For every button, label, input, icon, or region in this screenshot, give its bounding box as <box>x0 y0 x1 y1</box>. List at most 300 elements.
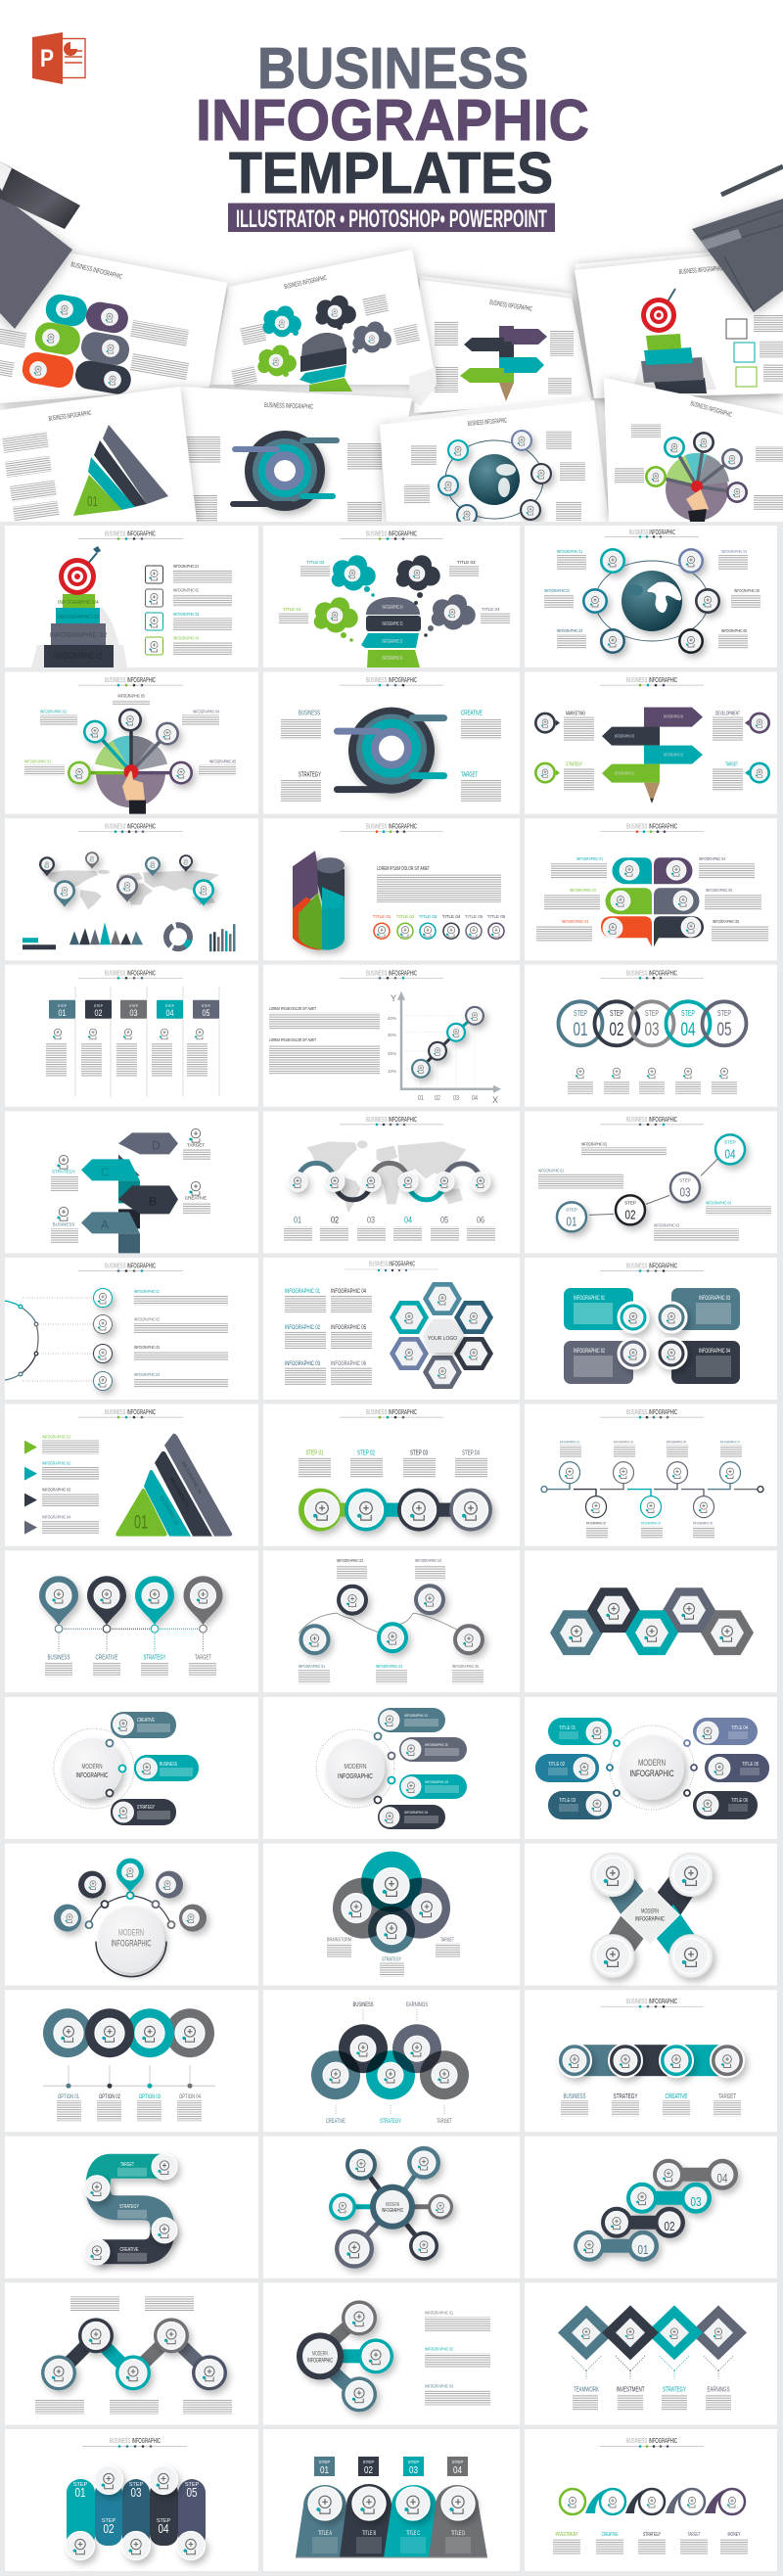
connectors <box>299 1613 459 1633</box>
head: INFOGRAPHIC 04 <box>382 605 403 611</box>
header: BUSINESS INFOGRAPHIC <box>626 1407 677 1416</box>
capsules: 01 <box>74 2485 86 2500</box>
step numbers <box>574 1009 732 1040</box>
nodes <box>288 1172 490 1191</box>
nodes <box>582 548 720 654</box>
text blocks <box>24 694 236 776</box>
circle row <box>373 914 506 939</box>
header: BUSINESS INFOGRAPHIC <box>105 968 156 977</box>
discs <box>311 2024 469 2099</box>
slide: four pins and dotted line <box>5 1550 258 1692</box>
text blocks: INFOGRAPHIC 07 <box>720 1441 740 1445</box>
capsules: STEP <box>157 2518 171 2524</box>
text blocks: STEP 01 <box>305 1450 324 1457</box>
slide card: thought clouds <box>209 250 437 406</box>
pencil <box>644 708 660 804</box>
text blocks: INVESTMENT <box>617 2386 645 2393</box>
pills: TITLE 05 <box>742 1762 759 1768</box>
hexagons <box>550 1587 754 1655</box>
slide: honeycomb <box>263 1258 520 1400</box>
step labels: STEP <box>679 1177 691 1182</box>
header <box>78 529 183 540</box>
header: BUSINESS INFOGRAPHIC <box>105 675 156 684</box>
text blocks: INFOGRAPHIC 02 <box>134 1317 160 1321</box>
text blocks: MONEY <box>728 2532 741 2538</box>
step labels: STEP <box>624 1200 636 1205</box>
rings <box>557 1134 745 1231</box>
pie <box>95 736 167 807</box>
arrows: INFOGRAPHIC 04 <box>664 714 683 719</box>
numbered text: 05 <box>440 1215 448 1224</box>
arrows: INFOGRAPHIC 03 <box>615 734 634 739</box>
triangle: 01 <box>134 1513 148 1534</box>
text blocks: INFOGRAPHIC 05 <box>331 1325 366 1331</box>
boxes <box>564 1288 740 1384</box>
pills: INFOGRAPHIC 02 <box>425 1742 449 1747</box>
text blocks: STRATEGY <box>299 772 321 779</box>
centre disc <box>316 1729 394 1808</box>
slide card: globe: BUSINESS INFOGRAPHIC <box>468 418 507 428</box>
text blocks: STRATEGY <box>643 2532 661 2538</box>
centre label: INFOGRAPHIC <box>307 2358 333 2364</box>
pills: INFOGRAPHIC 04 <box>404 1810 429 1815</box>
circles <box>41 2318 227 2390</box>
big disc: MODERN <box>118 1928 144 1938</box>
text blocks: INFOGRAPHIC 05 <box>706 888 732 893</box>
icons and text: BUSINESS <box>53 1221 74 1226</box>
chain <box>299 1489 492 1532</box>
centre disc: INFOGRAPHIC <box>338 1771 373 1780</box>
nodes <box>560 1462 740 1518</box>
step numbers: STEP <box>610 1009 623 1018</box>
text blocks <box>285 1289 372 1385</box>
text blocks: INFOGRAPHIC 05 <box>667 1441 686 1445</box>
nodes <box>607 1740 697 1796</box>
swirls <box>560 2488 745 2514</box>
labels: EARNINGS <box>406 2001 428 2008</box>
header <box>340 675 443 686</box>
capsules: STEP <box>102 2518 116 2524</box>
hub <box>370 2185 415 2230</box>
arrows: D <box>152 1138 161 1152</box>
arms <box>601 1863 703 1968</box>
text blocks: INFOGRAPHIC 02 <box>337 1558 363 1563</box>
icons and text: STRATEGY <box>52 1169 75 1173</box>
text blocks: TARGET <box>461 772 478 779</box>
text blocks: CREATIVE <box>461 711 483 717</box>
arrows <box>81 1132 178 1253</box>
clouds <box>314 555 476 642</box>
dotted leaders <box>336 2009 444 2115</box>
arrow markers and text <box>24 1435 99 1535</box>
stairs: INFOGRAPHIC 03 <box>58 615 99 621</box>
slide: four boxes <box>525 1258 777 1400</box>
step tabs: 03 <box>129 1008 137 1018</box>
text blocks <box>299 1558 484 1683</box>
axis chart <box>388 991 501 1105</box>
head: INFOGRAPHIC 02 <box>382 639 403 645</box>
text blocks: INFOGRAPHIC 04 <box>331 1289 366 1295</box>
connectors <box>59 2335 209 2372</box>
header: BUSINESS INFOGRAPHIC <box>366 1407 417 1416</box>
discs <box>43 2008 214 2057</box>
discs <box>308 2487 475 2520</box>
slide: hexagon band <box>525 1550 777 1692</box>
icons and text <box>46 1029 207 1077</box>
text blocks <box>134 1289 228 1388</box>
text blocks: INFOGRAPHIC 04 <box>721 549 747 554</box>
text blocks: INFOGRAPHIC 04 <box>699 856 725 861</box>
axis chart: 40% <box>388 1016 396 1021</box>
pills: TITLE 03 <box>559 1798 576 1804</box>
title <box>196 36 589 206</box>
text blocks: INFOGRAPHIC 03 <box>134 1345 160 1350</box>
text blocks: TARGET <box>687 2532 701 2538</box>
slide: six rounded petals <box>525 818 777 960</box>
step labels: 03 <box>679 1184 691 1199</box>
triangle: INFOGRAPHIC 04 <box>179 1461 203 1495</box>
text blocks: LOREM IPSUM DOLOR SIT AMET <box>269 1006 316 1012</box>
slide card: pencil signpost: BUSINESS INFOGRAPHIC <box>489 299 532 313</box>
text blocks: TARGET <box>718 2093 736 2100</box>
labels: CREATIVE <box>119 2247 139 2253</box>
step tabs: 05 <box>202 1008 209 1018</box>
text blocks: INFOGRAPHIC 04 <box>193 710 219 714</box>
header: BUSINESS INFOGRAPHIC <box>369 1259 415 1268</box>
text blocks: OPTION 02 <box>99 2093 120 2100</box>
arrow markers and text: INFOGRAPHIC 04 <box>42 1515 70 1521</box>
icon: PowerPoint logo: P <box>40 45 54 72</box>
text blocks: INFOGRAPHIC 04 <box>641 1522 661 1526</box>
slide card: target stairs <box>575 245 783 398</box>
centre disc: MODERN <box>345 1762 366 1771</box>
options line <box>43 2065 215 2089</box>
icons and text <box>568 1068 737 1094</box>
arc nodes <box>86 1892 174 1928</box>
donut chart <box>166 925 190 948</box>
step numbers: 03 <box>644 1020 660 1040</box>
capsules: STEP <box>129 2482 144 2488</box>
text blocks: BUSINESS <box>47 1653 70 1662</box>
step tabs: STEP <box>165 1004 175 1008</box>
step numbers: 04 <box>681 1020 696 1040</box>
step tabs: STEP <box>202 1004 211 1008</box>
slide: overlapping circles <box>263 1844 520 1986</box>
paragraph: LOREM IPSUM DOLOR SIT AMET <box>377 866 430 872</box>
tags: 03 <box>409 2465 418 2476</box>
band <box>558 2044 744 2077</box>
slide card: target stairs: BUSINESS INFOGRAPHIC <box>679 265 722 276</box>
text blocks: TITLE 01 <box>283 607 301 612</box>
slide: five swirls <box>525 2429 777 2571</box>
text blocks: OPTION 01 <box>58 2093 79 2100</box>
text blocks: OPTION 04 <box>179 2093 201 2100</box>
slide: pencil signpost <box>525 672 777 814</box>
text blocks <box>564 712 743 792</box>
icon: PowerPoint logo <box>32 32 85 84</box>
side nodes <box>534 713 770 784</box>
slide: modern infographic six pills <box>525 1697 777 1839</box>
header <box>600 1407 704 1418</box>
hub: INFOGRAPHIC <box>382 2208 403 2214</box>
capsules: 02 <box>104 2521 114 2536</box>
subtitle banner <box>228 204 555 233</box>
title: TEMPLATES <box>229 141 553 206</box>
step tabs <box>49 1000 219 1019</box>
panel: slide grid background <box>0 522 783 2576</box>
slide: five capsules <box>5 2429 258 2571</box>
icons and text: CREATIVE <box>185 1195 207 1200</box>
title: INFOGRAPHIC <box>196 88 589 153</box>
header: BUSINESS INFOGRAPHIC <box>626 2436 677 2445</box>
step numbers: 02 <box>609 1020 624 1040</box>
circles <box>333 1852 450 1954</box>
circle row: TITLE 05 <box>465 914 484 919</box>
circle row: TITLE 06 <box>487 914 506 919</box>
text blocks: INVESTMENT <box>556 2532 577 2538</box>
tags: STEP <box>363 2460 374 2464</box>
axis chart: 30% <box>388 1033 396 1037</box>
text blocks <box>35 2296 232 2414</box>
text blocks: STRATEGY <box>143 1653 166 1662</box>
icon boxes and text: INFOGRAPHIC 02 <box>173 587 199 593</box>
head: INFOGRAPHIC 03 <box>382 621 403 627</box>
text blocks: INFOGRAPHIC 01 <box>299 1664 325 1669</box>
text blocks: LOREM IPSUM DOLOR SIT AMET <box>269 1037 316 1043</box>
text blocks: INFOGRAPHIC 02 <box>544 588 570 593</box>
centre label <box>307 2351 333 2364</box>
pills <box>535 1718 769 1819</box>
numbered text <box>284 1215 495 1241</box>
header <box>340 822 443 833</box>
header: BUSINESS INFOGRAPHIC <box>626 1261 677 1270</box>
icon boxes and text <box>145 564 232 655</box>
target <box>59 546 101 595</box>
centre disc: INFOGRAPHIC <box>630 1769 674 1778</box>
globe <box>595 561 709 641</box>
icon boxes and text: INFOGRAPHIC 04 <box>173 636 199 640</box>
big disc <box>96 1907 166 1977</box>
dotted leaders <box>23 1298 93 1381</box>
step numbers: 05 <box>716 1020 732 1040</box>
text blocks <box>544 549 760 649</box>
boxes: INFOGRAPHIC 01 <box>574 1296 605 1302</box>
step tabs: STEP <box>129 1004 139 1008</box>
labels: BUSINESS <box>352 2001 374 2008</box>
labels: STRATEGY <box>119 2204 139 2210</box>
circles <box>297 2300 393 2412</box>
text blocks <box>425 2310 490 2405</box>
spokes <box>343 2163 440 2249</box>
slide: ABCD arrows <box>5 1111 258 1253</box>
world map <box>307 1140 466 1213</box>
text blocks: TITLE 03 <box>457 560 476 565</box>
axis chart: 04 <box>472 1095 478 1102</box>
arrows: C <box>101 1165 110 1178</box>
slide: modern infographic four pills <box>263 1697 520 1839</box>
header: BUSINESS INFOGRAPHIC <box>366 968 417 977</box>
slide: arc of five pins <box>5 1844 258 1986</box>
text blocks: INFOGRAPHIC 01 <box>24 759 51 764</box>
icons <box>305 1493 487 1527</box>
icons <box>98 1293 107 1387</box>
labels: CREATIVE <box>326 2118 345 2125</box>
column shadows <box>75 987 219 1097</box>
slide: dome columns <box>263 2429 520 2571</box>
header <box>340 1407 443 1418</box>
head: INFOGRAPHIC 01 <box>382 656 403 662</box>
slide: hub and spokes <box>263 2137 520 2278</box>
stairs: INFOGRAPHIC 04 <box>58 600 99 606</box>
labels: TITLE B <box>362 2530 376 2537</box>
text blocks <box>269 1006 380 1075</box>
numbered text: 04 <box>404 1215 412 1224</box>
arrow markers and text: INFOGRAPHIC 03 <box>42 1488 70 1494</box>
rings <box>558 1001 746 1045</box>
step labels: 02 <box>624 1207 636 1221</box>
text blocks <box>281 711 501 803</box>
header <box>600 968 704 980</box>
boxes: INFOGRAPHIC 03 <box>699 1296 730 1302</box>
map pins <box>39 851 214 907</box>
slide card: petals <box>0 240 227 403</box>
header <box>340 968 443 980</box>
capsules: STEP <box>73 2482 88 2488</box>
hexagons <box>390 1282 493 1389</box>
triangle: INFOGRAPHIC 03 <box>167 1477 190 1509</box>
step labels: STEP <box>566 1207 577 1212</box>
text blocks: INFOGRAPHIC 06 <box>693 1522 713 1526</box>
text blocks: TITLE 04 <box>482 607 500 612</box>
labels: TARGET <box>120 2162 134 2168</box>
header: BUSINESS INFOGRAPHIC <box>366 822 417 831</box>
header: BUSINESS INFOGRAPHIC <box>105 1407 156 1416</box>
stairs: INFOGRAPHIC 02 <box>50 632 107 639</box>
spokes and nodes <box>68 709 193 785</box>
text blocks: INFOGRAPHIC 01 <box>425 2310 453 2316</box>
text blocks: STEP 04 <box>462 1450 480 1457</box>
capsules: STEP <box>185 2482 200 2488</box>
text blocks: BRAINSTORM <box>327 1938 351 1944</box>
text blocks: MARKETING <box>566 712 585 717</box>
text blocks: INFOGRAPHIC 03 <box>654 1222 679 1227</box>
text blocks: TITLE 02 <box>306 560 325 565</box>
cylinder chart <box>293 851 345 950</box>
text blocks <box>536 856 768 942</box>
arrows <box>589 1157 719 1215</box>
circle row: TITLE 01 <box>373 914 392 919</box>
text blocks: INFOGRAPHIC 01 <box>134 1289 160 1294</box>
slide card: rings: BUSINESS INFOGRAPHIC <box>264 402 313 411</box>
hub: MODERN <box>386 2202 399 2208</box>
nodes <box>374 1732 395 1803</box>
text blocks: DEVELOPMENT <box>715 712 740 717</box>
text blocks <box>553 2532 748 2554</box>
step numbers: STEP <box>681 1009 695 1018</box>
text blocks: STEP 02 <box>357 1450 375 1457</box>
centre disc: MODERN <box>82 1764 102 1771</box>
text blocks: INFOGRAPHIC 05 <box>452 1664 479 1669</box>
arms: INFOGRAPHIC <box>635 1916 665 1923</box>
slide card: thought clouds: BUSINESS INFOGRAPHIC <box>284 275 327 291</box>
icons and text: TARGET <box>187 1142 205 1147</box>
pills <box>378 1708 467 1829</box>
wave <box>298 1163 481 1200</box>
boxes: INFOGRAPHIC 04 <box>699 1349 730 1355</box>
axis chart: 10% <box>388 1069 396 1074</box>
paragraph <box>377 866 501 902</box>
step tabs: STEP <box>94 1004 104 1008</box>
text blocks <box>573 2386 731 2411</box>
text blocks: INFOGRAPHIC 02 <box>570 888 596 893</box>
arc <box>89 1896 171 1925</box>
text blocks: TARGET <box>195 1653 211 1662</box>
labels: TITLE C <box>406 2530 420 2537</box>
header <box>340 1115 443 1126</box>
slide card: globe <box>380 395 609 526</box>
text blocks <box>299 1450 487 1478</box>
header: BUSINESS INFOGRAPHIC <box>110 2436 161 2445</box>
text blocks: INFOGRAPHIC 06 <box>721 628 747 633</box>
text blocks: INFOGRAPHIC 02 <box>581 1141 607 1146</box>
timeline <box>541 1483 763 1497</box>
text blocks: INFOGRAPHIC 02 <box>425 2346 453 2352</box>
labels <box>312 2530 471 2553</box>
slide: zigzag circles <box>263 1550 520 1692</box>
text blocks <box>279 560 510 624</box>
arrow markers and text: INFOGRAPHIC 01 <box>42 1435 70 1441</box>
tags: 01 <box>320 2465 329 2476</box>
text blocks <box>57 2093 202 2121</box>
text blocks <box>538 1141 771 1241</box>
head <box>361 597 421 667</box>
triangle: INFOGRAPHIC 02 <box>158 1495 179 1526</box>
header: BUSINESS INFOGRAPHIC <box>626 968 677 977</box>
slide: S ribbon <box>5 2137 258 2278</box>
centre label: MODERN <box>312 2351 328 2357</box>
pills: TITLE 01 <box>559 1725 576 1731</box>
axis chart: 02 <box>435 1095 440 1102</box>
header: BUSINESS INFOGRAPHIC <box>626 822 677 831</box>
tags: STEP <box>319 2460 330 2464</box>
step numbers: 01 <box>574 1020 587 1040</box>
icon boxes and text: INFOGRAPHIC 03 <box>173 612 199 617</box>
step numbers: STEP <box>574 1009 587 1018</box>
slide: chain of four circles <box>263 1404 520 1546</box>
text blocks: INFOGRAPHIC 01 <box>576 856 603 861</box>
labels: STRATEGY <box>380 2118 401 2125</box>
text blocks: INFOGRAPHIC 01 <box>285 1289 320 1295</box>
arrows: B <box>149 1194 157 1208</box>
arrows: INFOGRAPHIC 01 <box>615 771 634 776</box>
header <box>600 1261 704 1272</box>
slide card: pencil signpost <box>414 276 592 413</box>
connectors <box>332 2318 376 2394</box>
header: BUSINESS INFOGRAPHIC <box>366 675 417 684</box>
step labels: STEP <box>724 1139 736 1144</box>
numbered text: 02 <box>331 1215 339 1224</box>
axis chart: 01 <box>418 1095 424 1102</box>
slide: head with thought clouds <box>263 526 520 667</box>
header <box>600 2436 704 2448</box>
text blocks: INFOGRAPHIC 02 <box>40 710 67 714</box>
text blocks: INFOGRAPHIC 04 <box>415 1558 441 1563</box>
circle row: TITLE 04 <box>442 914 461 919</box>
text blocks <box>560 1441 742 1539</box>
dotted arrows <box>572 2356 733 2378</box>
circles <box>299 1584 484 1655</box>
icons <box>595 1858 709 1974</box>
